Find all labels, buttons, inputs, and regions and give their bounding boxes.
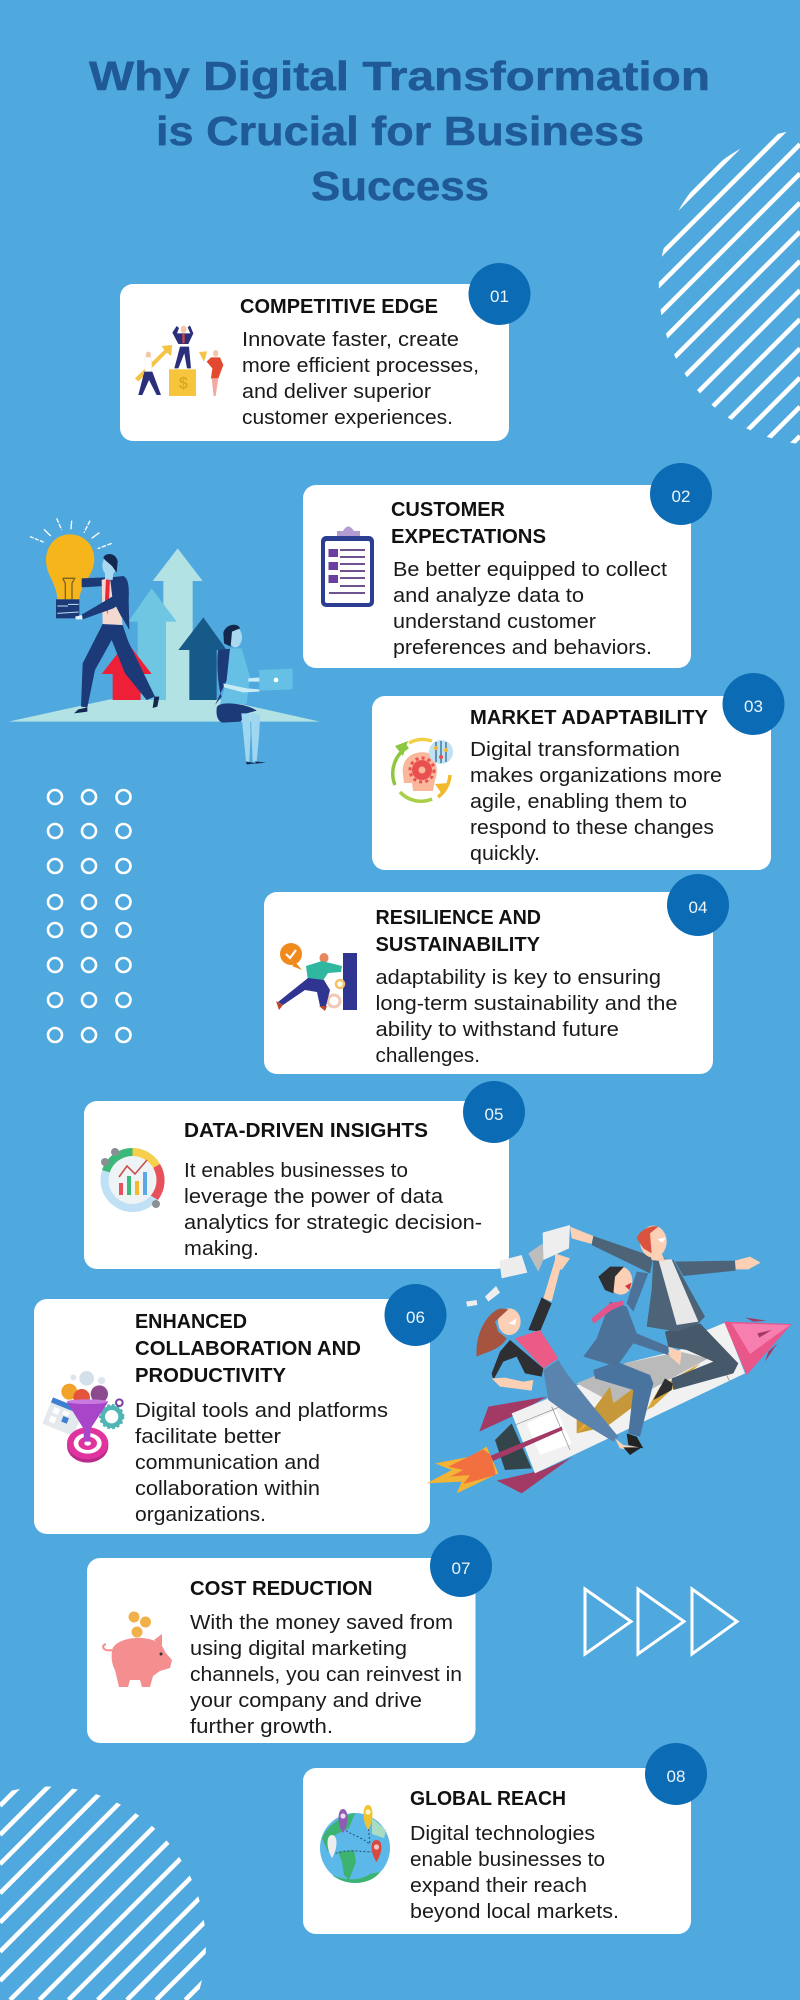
body text: adaptability is key to ensuring [376, 967, 661, 989]
body text: expand their reach [410, 1875, 587, 1897]
body text: Digital transformation [470, 739, 680, 761]
card 06: enhanced collaboration and productivity [34, 1284, 446, 1534]
body text: analytics for strategic decision- [184, 1212, 482, 1234]
body text: agile, enabling them to [470, 791, 687, 813]
body text: using digital marketing [190, 1638, 407, 1660]
body text [470, 739, 722, 865]
heading: MARKET ADAPTABILITY [470, 707, 709, 729]
body text: and deliver superior [242, 381, 431, 403]
body text [376, 967, 678, 1067]
body text: and analyze data to [393, 585, 584, 607]
number badge: 07 [452, 1559, 470, 1578]
heading [376, 907, 541, 956]
body text: It enables businesses to [184, 1160, 408, 1182]
body text: understand customer [393, 611, 596, 633]
body text: enable businesses to [410, 1849, 605, 1871]
body text: making. [184, 1238, 259, 1260]
title: Why Digital Transformation [89, 53, 710, 99]
heading: COMPETITIVE EDGE [240, 296, 438, 318]
number badge [384, 1284, 446, 1346]
card 04: resilience and sustainability [264, 874, 729, 1074]
number badge [463, 1081, 525, 1143]
number badge: 03 [744, 697, 763, 716]
body text: respond to these changes [470, 817, 714, 839]
icon: clipboard checklist [321, 526, 374, 607]
body text: more efficient processes, [242, 355, 479, 377]
body text: your company and drive [190, 1690, 422, 1712]
card 05: data-driven insights [84, 1081, 525, 1269]
heading: PRODUCTIVITY [135, 1365, 287, 1387]
body text [410, 1823, 619, 1923]
body text [242, 329, 479, 429]
heading: COLLABORATION AND [135, 1338, 361, 1360]
illustration: business people with light bulb and growth arrows [8, 518, 320, 764]
title: Success [311, 163, 489, 209]
body text: Be better equipped to collect [393, 559, 667, 581]
number badge [667, 874, 729, 936]
number badge: 06 [406, 1308, 425, 1327]
body text: With the money saved from [190, 1612, 453, 1634]
body text: Digital tools and platforms [135, 1400, 388, 1422]
number badge: 02 [672, 487, 690, 506]
body text: communication and [135, 1452, 320, 1474]
body text: Digital technologies [410, 1823, 595, 1845]
body text: long-term sustainability and the [376, 993, 678, 1015]
heading: COST REDUCTION [190, 1578, 372, 1600]
number badge: 04 [689, 898, 707, 917]
icon: head with gear and cycle arrows [393, 739, 453, 801]
body text: ability to withstand future [376, 1019, 619, 1041]
heading: GLOBAL REACH [410, 1788, 566, 1810]
body text: channels, you can reinvest in [190, 1664, 462, 1686]
dot grid decoration [48, 790, 130, 1042]
body text [190, 1612, 462, 1738]
heading: ENHANCED [135, 1311, 247, 1333]
icon: piggy bank with coins [103, 1612, 172, 1687]
striped circle: bottom left [0, 1786, 206, 2000]
body text: customer experiences. [242, 407, 453, 429]
number badge: 01 [490, 287, 509, 306]
heading: DATA-DRIVEN INSIGHTS [184, 1120, 428, 1142]
body text: challenges. [376, 1045, 480, 1067]
icon: podium team: $ [179, 374, 189, 393]
body text: facilitate better [135, 1426, 281, 1448]
icon: podium team [135, 325, 223, 396]
heading [391, 499, 546, 548]
body text: quickly. [470, 843, 540, 865]
body text: Innovate faster, create [242, 329, 459, 351]
icon: analytics dial [100, 1148, 165, 1212]
number badge [468, 263, 530, 325]
body text: collaboration within [135, 1478, 320, 1500]
number badge [430, 1535, 492, 1597]
card 08: global reach [303, 1743, 707, 1934]
body text: beyond local markets. [410, 1901, 619, 1923]
icon: globe with map pins [320, 1805, 390, 1883]
card 03: market adaptability [372, 673, 784, 870]
icon: person pushing a pillar [276, 943, 357, 1011]
card 07: cost reduction [87, 1535, 492, 1743]
title: is Crucial for Business [156, 108, 644, 154]
triple chevron arrows [585, 1589, 737, 1654]
heading: RESILIENCE AND [376, 907, 541, 929]
number badge [722, 673, 784, 735]
body text: preferences and behaviors. [393, 637, 652, 659]
number badge [650, 463, 712, 525]
heading: EXPECTATIONS [391, 526, 546, 548]
card 02: customer expectations [303, 463, 712, 668]
body text: further growth. [190, 1716, 333, 1738]
card 01: competitive edge [120, 263, 530, 441]
striped circle: top right [658, 132, 800, 444]
body text [184, 1160, 482, 1260]
number badge: 05 [485, 1105, 503, 1124]
heading [135, 1311, 361, 1387]
number badge [645, 1743, 707, 1805]
illustration: team riding a rocket [427, 1225, 792, 1493]
title [89, 53, 710, 209]
body text: makes organizations more [470, 765, 722, 787]
heading: CUSTOMER [391, 499, 506, 521]
icon: funnel with target [42, 1371, 123, 1463]
body text [135, 1400, 388, 1526]
body text: organizations. [135, 1504, 266, 1526]
number badge: 08 [667, 1767, 685, 1786]
heading: SUSTAINABILITY [376, 934, 541, 956]
body text [393, 559, 667, 659]
body text: leverage the power of data [184, 1186, 444, 1208]
